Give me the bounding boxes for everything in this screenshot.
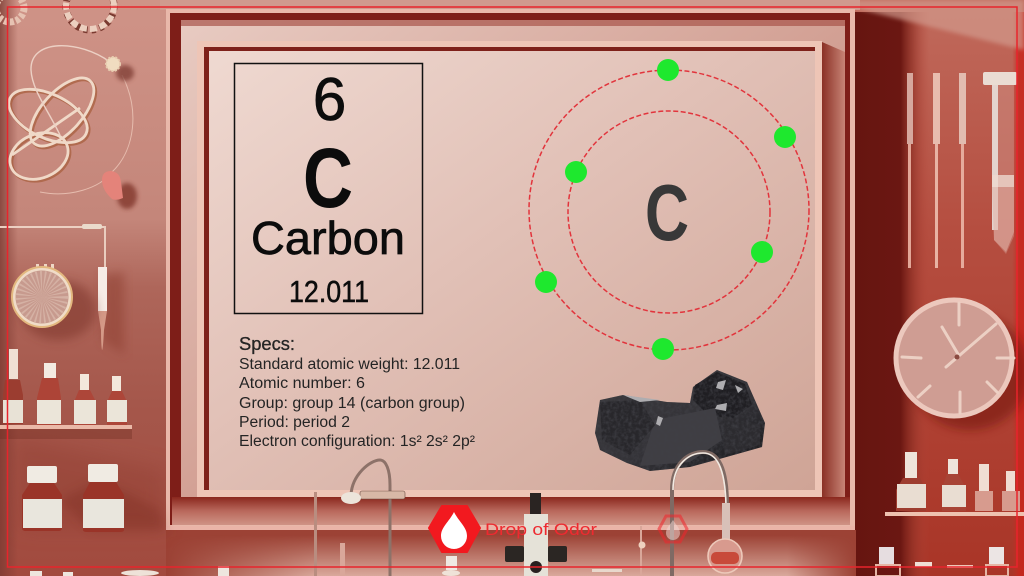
bottle 5: [22, 466, 62, 531]
nucleus label: C: [645, 168, 689, 257]
wall clock: [896, 300, 1024, 430]
panel surface: [209, 51, 815, 490]
element card: [234, 64, 422, 314]
large bottles: [22, 464, 165, 532]
icon: hexagon drop: [429, 506, 480, 552]
bottle 4: [107, 376, 127, 425]
electrons: [535, 59, 796, 360]
decor: top left gear: [0, 0, 24, 22]
brand name: Drop of Odor: [485, 520, 597, 539]
decor: round sieve: [12, 264, 96, 340]
decor: hanging dropper rack: [0, 224, 124, 355]
specs text block: [239, 333, 475, 450]
decor: top ring gear: [66, 0, 114, 30]
specs text block: Group: group 14 (carbon group): [239, 395, 465, 412]
lab stand lamp: [314, 460, 405, 576]
bottle 7: [896, 452, 926, 511]
atom diagram: [529, 59, 809, 360]
microscope: [505, 493, 567, 576]
coal sample: [595, 370, 765, 471]
specs text block: Atomic number: 6: [239, 375, 365, 392]
bottle 6: [83, 464, 124, 532]
decor: wire knot: [1, 46, 133, 194]
bottle 8: [942, 459, 966, 511]
electron shells: [529, 70, 809, 350]
right pipettes: [907, 73, 966, 268]
right shelf with bottles: [885, 452, 1024, 516]
specs heading: Specs:: [239, 333, 295, 354]
element symbol: C: [303, 131, 353, 225]
element name: Carbon: [251, 212, 405, 264]
specs text block: Electron configuration: 1s² 2s² 2p²: [239, 433, 475, 450]
bottle 3: [74, 374, 96, 425]
decor: small bead: [106, 57, 134, 81]
bottom edge lab items: [30, 526, 1008, 576]
faucet with flask: [672, 452, 742, 576]
bottle 10: [1002, 471, 1020, 511]
bottle 9: [975, 464, 993, 511]
atomic weight: 12.011: [289, 274, 369, 309]
frame bottom band: [172, 497, 850, 525]
logo: Drop of Odor: [429, 506, 597, 552]
right test tube: [983, 72, 1017, 254]
bottle 2: [37, 363, 61, 425]
atomic number: 6: [313, 66, 346, 133]
faint watermark icon: [659, 516, 687, 542]
picture frame: [166, 9, 855, 530]
decor: pink bead: [102, 171, 137, 209]
left shelf with bottles: [0, 349, 132, 439]
specs text block: Standard atomic weight: 12.011: [239, 356, 460, 373]
bottle 1: [3, 349, 23, 424]
frame right side shadow: [822, 42, 845, 497]
specs text block: Period: period 2: [239, 414, 350, 431]
